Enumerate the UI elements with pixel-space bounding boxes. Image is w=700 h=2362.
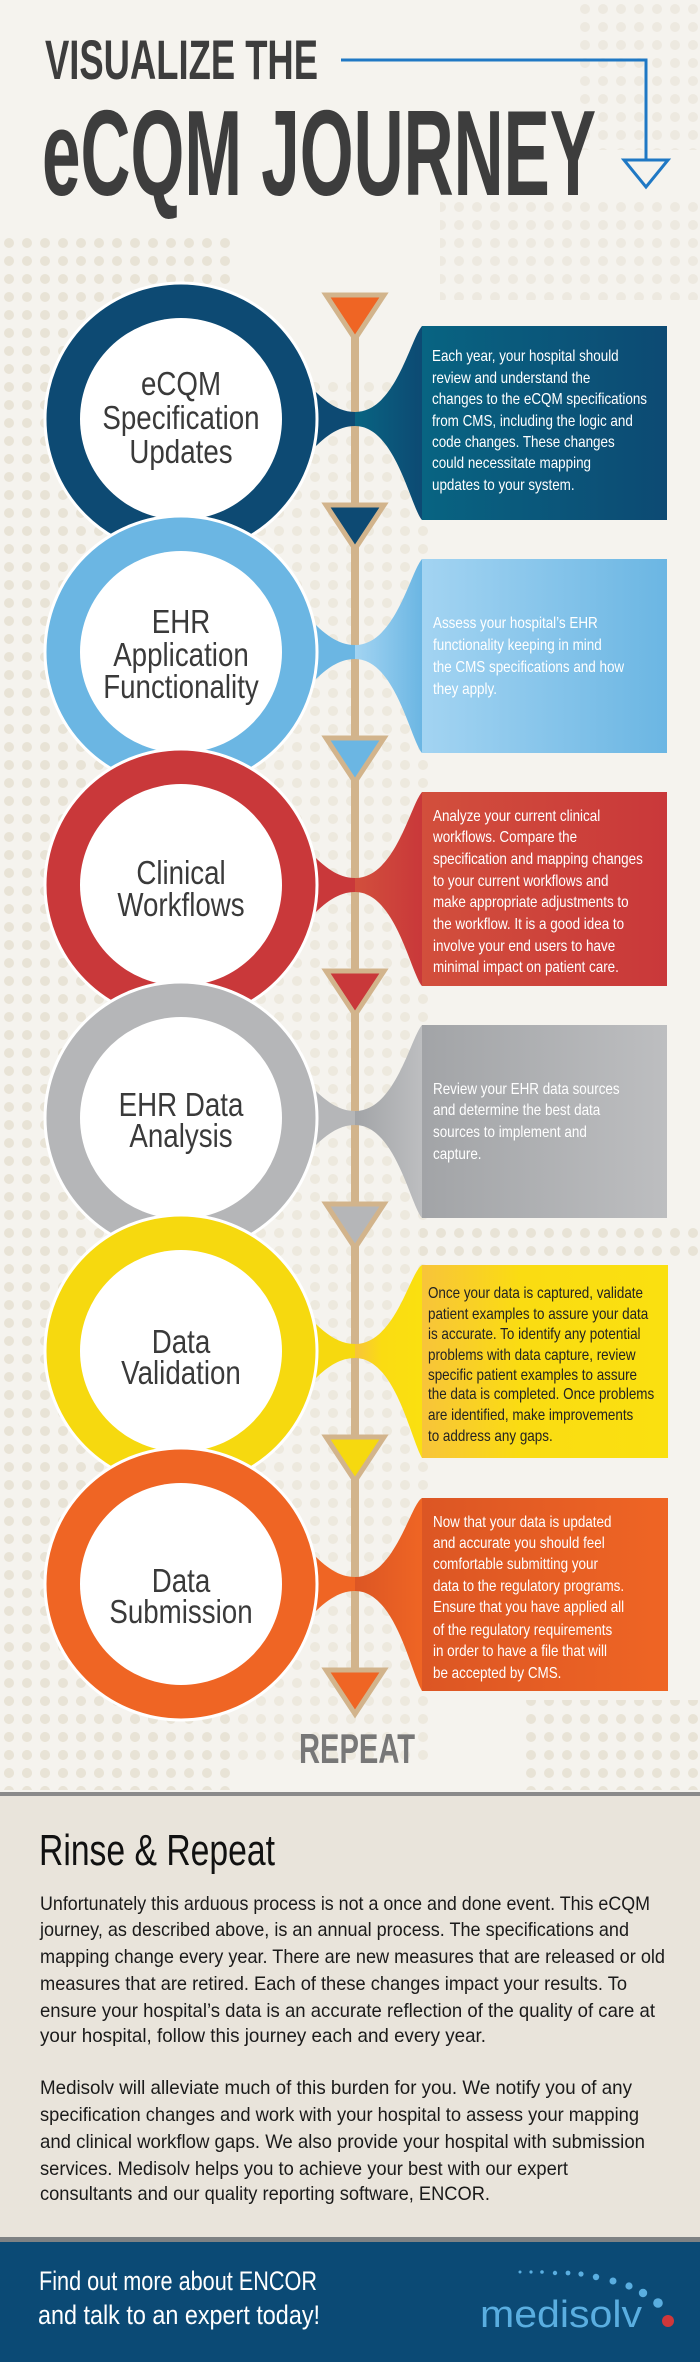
step 5: Data Validation: Data [152, 1324, 210, 1361]
step 1: eCQM Specification Updates: changes to the eCQM specifications [432, 391, 647, 408]
panel: Rinse & Repeat: and clinical workflow gaps. We also provide your hospital with submission [40, 2131, 645, 2153]
step 3: Clinical Workflows: to your current workflows and [433, 873, 608, 890]
step 1: eCQM Specification Updates: Specification [102, 400, 260, 437]
step 4: EHR Data Analysis: EHR Data [119, 1087, 243, 1124]
step 2: EHR Application Functionality: Functionality [103, 669, 259, 706]
step 1: eCQM Specification Updates: could necessitate mapping [432, 455, 591, 472]
step 2: EHR Application Functionality [45, 516, 667, 788]
step 3: Clinical Workflows: workflows. Compare the [432, 829, 577, 846]
step 3: Clinical Workflows: specification and mapping changes [433, 851, 643, 868]
step 6: Data Submission: comfortable submitting your [433, 1556, 598, 1573]
step 4: EHR Data Analysis [45, 982, 667, 1254]
step 5: Data Validation: patient examples to assure your data [428, 1306, 649, 1323]
panel: Rinse & Repeat [0, 1792, 700, 2237]
panel: Rinse & Repeat: Unfortunately this arduous process is not a once and done event. This eCQM [40, 1893, 650, 1915]
step 3: Clinical Workflows: Clinical [136, 855, 226, 892]
step 2: EHR Application Functionality: functionality keeping in mind [433, 637, 602, 654]
panel: Rinse & Repeat: specification changes and work with your hospital to assess your mapping [40, 2104, 639, 2126]
step 4: EHR Data Analysis: Analysis [129, 1118, 233, 1155]
step 6: Data Submission: and accurate you should feel [433, 1535, 605, 1552]
step 3: Clinical Workflows: Workflows [117, 887, 245, 924]
logo: medisolv: medisolv [480, 2294, 642, 2336]
step 3: Clinical Workflows: the workflow. It is a good idea to [433, 916, 624, 933]
step 1: eCQM Specification Updates: eCQM [141, 366, 221, 403]
step 2: EHR Application Functionality: Application [113, 637, 249, 674]
step 5: Data Validation: are identified, make improvements [428, 1407, 633, 1424]
step 6: Data Submission: Ensure that you have applied all [433, 1599, 624, 1616]
step 6: Data Submission: in order to have a file that will [433, 1643, 607, 1660]
arrow: title connector [341, 60, 668, 187]
step 3: Clinical Workflows [45, 749, 667, 1021]
panel: Rinse & Repeat: services. Medisolv helps you to achieve your best with our expert [40, 2158, 569, 2180]
step 4: EHR Data Analysis: sources to implement and [433, 1124, 587, 1141]
panel: Rinse & Repeat: consultants and our quality reporting software, ENCOR. [40, 2183, 490, 2205]
step 2: EHR Application Functionality: they apply. [433, 681, 497, 698]
footer call to action: Find out more about ENCOR [39, 2266, 317, 2296]
title: VISUALIZE THE [45, 28, 318, 91]
step 1: eCQM Specification Updates: from CMS, including the logic and [432, 413, 633, 430]
step 1: eCQM Specification Updates [45, 283, 667, 555]
panel: Rinse & Repeat: Rinse & Repeat [39, 1826, 275, 1875]
step 6: Data Submission: Submission [109, 1594, 253, 1631]
panel: Rinse & Repeat: your hospital, follow this journey each and every year. [40, 2025, 486, 2047]
background dot pattern [0, 0, 700, 1790]
step 1: eCQM Specification Updates: Updates [129, 434, 233, 471]
step 4: EHR Data Analysis: Review your EHR data sources [433, 1081, 620, 1098]
step 5: Data Validation: specific patient examples to assure [428, 1367, 637, 1384]
step 6: Data Submission: be accepted by CMS. [433, 1665, 561, 1682]
footer call to action: and talk to an expert today! [38, 2300, 320, 2330]
REPEAT label: REPEAT [299, 1725, 415, 1772]
step 6: Data Submission: data to the regulatory programs. [433, 1578, 624, 1595]
step 5: Data Validation: is accurate. To identify any potential [428, 1326, 641, 1343]
step 3: Clinical Workflows: make appropriate adjustments to [433, 894, 629, 911]
step 6: Data Submission: Now that your data is updated [433, 1514, 611, 1531]
step 4: EHR Data Analysis: and determine the best data [433, 1102, 601, 1119]
step 1: eCQM Specification Updates: Each year, your hospital should [432, 348, 619, 365]
step 2: EHR Application Functionality: the CMS specifications and how [433, 659, 624, 676]
step 6: Data Submission [45, 1448, 668, 1720]
step 5: Data Validation: to address any gaps. [428, 1428, 553, 1445]
step 1: eCQM Specification Updates: review and understand the [432, 370, 590, 387]
step 5: Data Validation: Validation [121, 1355, 241, 1392]
step 5: Data Validation [45, 1215, 668, 1487]
panel: Rinse & Repeat: journey, as described above, is an annual process. The specifications and [39, 1919, 629, 1941]
step 2: EHR Application Functionality: EHR [152, 604, 210, 641]
step 5: Data Validation: Once your data is captured, validate [428, 1285, 643, 1302]
step 2: EHR Application Functionality: Assess your hospital’s EHR [433, 615, 598, 632]
step 3: Clinical Workflows: Analyze your current clinical [433, 808, 600, 825]
step 3: Clinical Workflows: involve your end users to have [433, 938, 615, 955]
timeline arrows [326, 295, 384, 1714]
panel: Rinse & Repeat: Medisolv will alleviate much of this burden for you. We notify you of any [40, 2077, 632, 2099]
title [42, 28, 596, 221]
step 1: eCQM Specification Updates: updates to your system. [432, 477, 575, 494]
panel: Rinse & Repeat: mapping change every year. There are new measures that are released or old [40, 1946, 665, 1968]
step 1: eCQM Specification Updates: code changes. These changes [432, 434, 615, 451]
step 6: Data Submission: of the regulatory requirements [433, 1622, 612, 1639]
logo: medisolv [480, 2270, 674, 2336]
step 3: Clinical Workflows: minimal impact on patient care. [433, 959, 619, 976]
step 5: Data Validation: problems with data capture, review [428, 1347, 636, 1364]
step 5: Data Validation: the data is completed. Once problems [428, 1386, 654, 1403]
step 6: Data Submission: Data [152, 1563, 210, 1600]
step 4: EHR Data Analysis: capture. [433, 1146, 482, 1163]
panel: Rinse & Repeat: ensure your hospital’s data is an accurate reflection of the quality of care at [40, 2000, 656, 2022]
panel: Rinse & Repeat: measures that are retired. Each of these changes impact your results. To [40, 1973, 627, 1995]
vertical timeline line [351, 300, 359, 1685]
footer [0, 2237, 700, 2362]
